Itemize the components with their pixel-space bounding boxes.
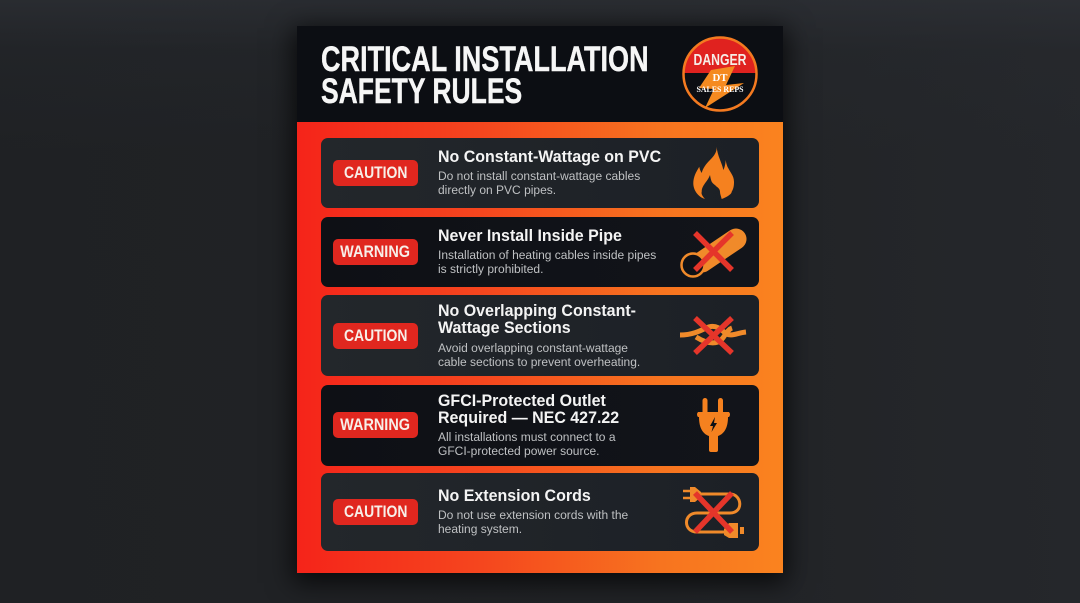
rule 4 description: All installations must connect to a [438, 430, 616, 444]
rule 2 description [438, 248, 656, 276]
rule 4 description: GFCI-protected power source. [438, 444, 599, 458]
rule 1 panel [321, 138, 759, 208]
caution badge [333, 499, 418, 525]
rule 1 description: directly on PVC pipes. [438, 183, 556, 197]
title: SAFETY RULES [321, 72, 522, 111]
safety poster [297, 26, 783, 573]
caution badge: CAUTION [344, 163, 407, 182]
logo: danger badge: SALES REPS [696, 85, 744, 94]
warning badge [333, 239, 418, 265]
icon: extension cord crossed out [683, 487, 744, 538]
rule 4 panel [321, 385, 759, 466]
rule 3 panel [321, 295, 759, 376]
rule 3 description [438, 341, 640, 369]
rule 4 heading: Required — NEC 427.22 [438, 408, 619, 427]
rule 3 heading: No Overlapping Constant- [438, 301, 636, 320]
rule 4 heading [438, 391, 619, 427]
rule 1 description: Do not install constant-wattage cables [438, 169, 640, 183]
warning badge: WARNING [341, 415, 410, 434]
icon: flame [693, 147, 734, 199]
icon: plug with bolt [697, 398, 730, 452]
logo: danger badge [682, 36, 758, 112]
logo: danger badge: DT [712, 72, 728, 84]
header band [297, 26, 783, 122]
rule 3 heading: Wattage Sections [438, 318, 571, 337]
rule 5 description: Do not use extension cords with the [438, 508, 628, 522]
caution badge: CAUTION [344, 326, 407, 345]
icon: overlapping cables crossed out [680, 316, 746, 355]
rule 3 description: cable sections to prevent overheating. [438, 355, 640, 369]
rule 1 description [438, 169, 640, 197]
warning badge [333, 412, 418, 438]
icon: cable in pipe crossed out [680, 228, 746, 278]
rule 4 description [438, 430, 616, 458]
caution badge [333, 323, 418, 349]
warning badge: WARNING [341, 242, 410, 261]
rule 1 heading: No Constant-Wattage on PVC [438, 147, 661, 166]
rule 5 description: heating system. [438, 522, 522, 536]
rule 5 heading: No Extension Cords [438, 486, 591, 505]
rule 2 description: is strictly prohibited. [438, 262, 543, 276]
rule 5 panel [321, 473, 759, 551]
rule 2 description: Installation of heating cables inside pipes [438, 248, 656, 262]
caution badge: CAUTION [344, 502, 407, 521]
caution badge [333, 160, 418, 186]
rule 2 panel [321, 217, 759, 287]
rule 3 heading [438, 301, 636, 337]
rule 4 heading: GFCI-Protected Outlet [438, 391, 606, 410]
rule 2 heading: Never Install Inside Pipe [438, 226, 622, 245]
rule 3 description: Avoid overlapping constant-wattage [438, 341, 628, 355]
title: CRITICAL INSTALLATION [321, 40, 649, 79]
title [321, 40, 649, 111]
rule 5 description [438, 508, 628, 536]
